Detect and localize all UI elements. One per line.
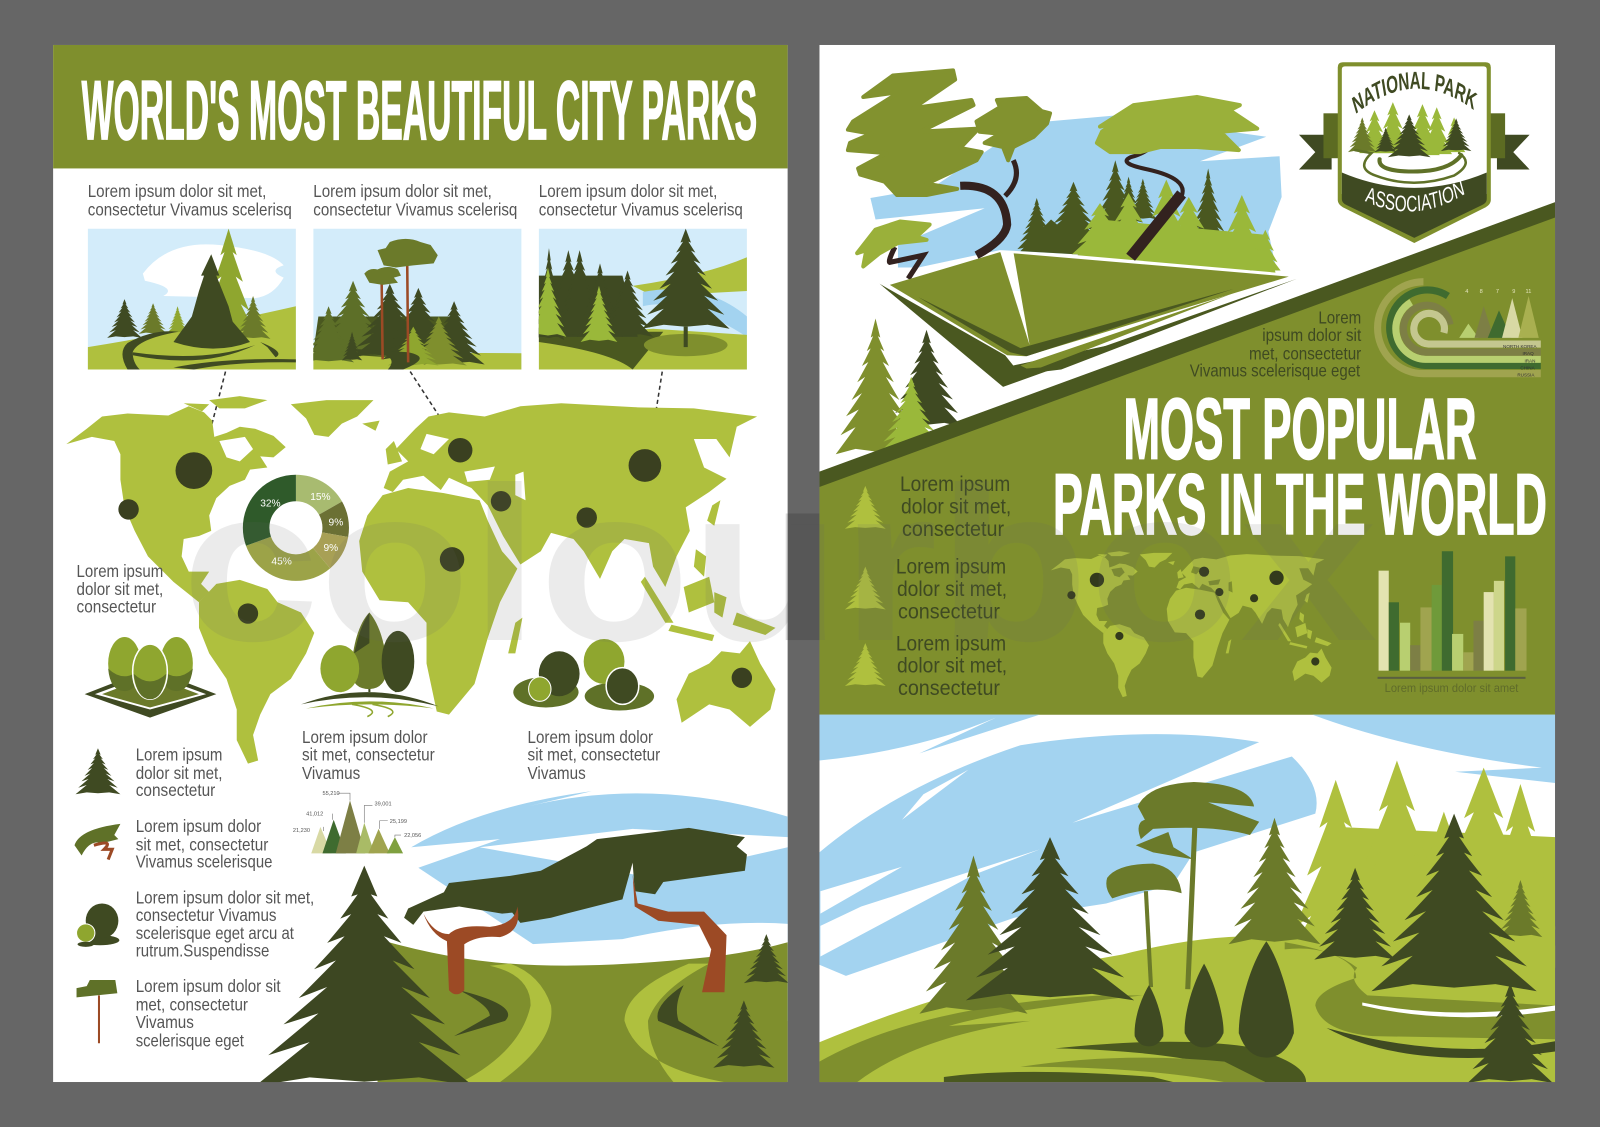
landscape image 2	[303, 229, 521, 370]
text: green note 3: dolor sit met,	[897, 655, 1007, 678]
scene: pale firs	[1285, 761, 1566, 968]
world map	[66, 396, 776, 764]
text: tree group note	[302, 730, 434, 779]
list text 4	[136, 976, 281, 1050]
peak chart: 4	[1465, 289, 1468, 295]
badge text bottom: ASSOCIATION	[1364, 181, 1464, 212]
icon: round tree	[77, 903, 119, 947]
badge	[1299, 62, 1530, 243]
list text 3: Lorem ipsum dolor sit met,	[136, 887, 314, 907]
text: green note 1: Lorem ipsum	[900, 473, 1010, 496]
map markers	[118, 438, 752, 688]
list text 1: dolor sit met,	[136, 763, 222, 783]
caption 2: consectetur Vivamus scelerisq	[313, 199, 517, 219]
text: upper note: Vivamus scelerisque eget	[1190, 361, 1360, 381]
text: cluster note: Lorem ipsum dolor	[528, 727, 653, 747]
list text 3: scelerisque eget arcu at	[136, 923, 294, 943]
scene: large fir	[255, 866, 473, 1086]
list text 1: Lorem ipsum	[136, 745, 222, 765]
text: upper note: Lorem	[1318, 308, 1361, 328]
peak chart	[1459, 289, 1539, 378]
landscape image 1	[88, 229, 296, 370]
green block with diagonal	[819, 202, 1555, 715]
donut chart: 45%	[271, 557, 292, 568]
badge text top: NATIONAL PARK	[1352, 72, 1478, 114]
scene: hills	[378, 939, 788, 1082]
text: cluster note: sit met, consectetur	[528, 745, 660, 765]
text: green note 2: dolor sit met,	[897, 578, 1007, 601]
icon: tall pine	[77, 980, 117, 1043]
bar chart: Lorem ipsum dolor sit amet	[1385, 681, 1519, 695]
text: map note	[77, 564, 162, 612]
caption 1	[88, 181, 292, 219]
text: map note: dolor sit met,	[77, 579, 163, 599]
list text 1: consectetur	[136, 780, 215, 800]
caption 3: consectetur Vivamus scelerisq	[539, 199, 743, 219]
bar chart	[1378, 551, 1527, 695]
caption 2	[313, 181, 517, 219]
mountain chart	[293, 791, 421, 853]
badge shield	[1338, 62, 1491, 243]
mountain chart: 55,210	[322, 791, 340, 797]
illustration: sky	[870, 115, 1282, 267]
headline	[1053, 380, 1547, 553]
scene: firs	[919, 814, 1553, 1083]
list text 3	[136, 887, 314, 961]
title band	[53, 45, 788, 168]
text: green note 2	[896, 556, 1007, 624]
mountain chart: 41,012	[306, 812, 323, 818]
icon: fir	[76, 748, 120, 794]
text: green note 1: consectetur	[902, 518, 1004, 541]
peak chart: RUSSIA	[1517, 373, 1535, 378]
peak chart: 8	[1480, 289, 1483, 295]
donut chart: 9%	[329, 518, 343, 529]
illustration: forest	[1017, 160, 1281, 273]
icon: round tree cluster	[513, 639, 654, 710]
list text 2: Vivamus scelerisque	[136, 852, 272, 872]
list text 3: rutrum.Suspendisse	[136, 941, 269, 961]
donut chart: 9%	[323, 543, 338, 554]
watermark gap bar	[786, 513, 819, 640]
peak chart: CHINA	[1520, 366, 1536, 371]
list text 4: Lorem ipsum dolor sit	[136, 976, 281, 996]
badge trees	[1348, 102, 1471, 157]
panel: right poster	[819, 45, 1556, 1082]
scene: white streaks	[820, 770, 1040, 957]
caption 1: Lorem ipsum dolor sit met,	[88, 181, 266, 201]
list text 4: met, consectetur	[136, 995, 248, 1015]
text: tree group note: sit met, consectetur	[302, 745, 435, 765]
text: green note 3: Lorem ipsum	[896, 632, 1006, 655]
text: green note 3	[896, 632, 1007, 700]
text: green note 2: consectetur	[898, 601, 1000, 624]
icon: windblown tree	[74, 824, 120, 860]
icon: light fir 2	[845, 567, 886, 609]
illustration: windblown canopies	[848, 70, 1257, 266]
text: map note: Lorem ipsum	[77, 561, 163, 581]
scene: small firs	[713, 934, 789, 1068]
illustration: park plot	[880, 251, 1297, 387]
text: green note 2: Lorem ipsum	[896, 556, 1006, 579]
donut chart: 32%	[260, 498, 281, 509]
list text 1	[136, 748, 222, 796]
scene: tall pines	[1106, 782, 1259, 989]
badge ribbon	[1299, 113, 1530, 169]
peak chart: IRAN	[1524, 358, 1535, 363]
text: upper note	[1190, 308, 1361, 381]
caption 3: Lorem ipsum dolor sit met,	[539, 181, 717, 201]
icon: three trees on plot	[85, 637, 216, 718]
scene: cypress trees	[1135, 941, 1294, 1058]
text: tree group note: Lorem ipsum dolor	[302, 727, 428, 747]
illustration: bent trunks	[889, 137, 1183, 279]
text: upper note: met, consectetur	[1249, 343, 1361, 363]
text: green note 1	[900, 473, 1011, 541]
mini map markers	[1067, 567, 1319, 666]
list text 2	[136, 816, 272, 872]
connector lines	[212, 371, 663, 424]
track chart	[1378, 282, 1541, 374]
donut chart: 15%	[310, 492, 331, 503]
text: tree group note: Vivamus	[302, 763, 360, 783]
caption 1: consectetur Vivamus scelerisq	[88, 199, 292, 219]
mini world map	[1051, 551, 1332, 697]
text: upper note: ipsum dolor sit	[1262, 325, 1361, 345]
icon: light fir 1	[845, 486, 886, 529]
watermark: colourbox	[182, 441, 1378, 687]
caption 3	[539, 181, 743, 219]
list text 2: Lorem ipsum dolor	[136, 816, 261, 836]
icon: light fir 3	[845, 643, 886, 686]
panel: left poster	[53, 45, 789, 1086]
text: green note 1: dolor sit met,	[901, 495, 1011, 518]
icon: tree group with road	[301, 612, 439, 717]
scene: windswept tree	[404, 828, 747, 994]
list text 3: consectetur Vivamus	[136, 905, 277, 925]
mountain chart: 39,001	[374, 801, 392, 807]
peak chart: IRAQ	[1522, 351, 1534, 356]
landscape image 3	[530, 229, 747, 370]
list text 2: sit met, consectetur	[136, 834, 268, 854]
list text 4: Vivamus	[136, 1012, 194, 1032]
donut chart	[256, 488, 343, 568]
text: cluster note: Vivamus	[528, 763, 586, 783]
scene: hill	[819, 934, 1555, 1082]
illustration: firs on slope	[836, 318, 962, 454]
caption 2: Lorem ipsum dolor sit met,	[313, 181, 492, 201]
mountain chart: 25,199	[390, 819, 407, 825]
peak chart: 7	[1496, 289, 1499, 295]
scene: winding road	[1285, 942, 1555, 1058]
mountain chart: 21,230	[293, 828, 310, 834]
peak chart: NORTH KOREA	[1503, 344, 1537, 349]
badge road	[1355, 150, 1466, 183]
peak chart: 9	[1512, 289, 1515, 295]
text: map note: consectetur	[77, 596, 156, 617]
scene: white clouds	[439, 829, 788, 968]
scene: shadows	[944, 1042, 1306, 1082]
text: cluster note	[528, 730, 660, 779]
list text 4: scelerisque eget	[136, 1030, 244, 1050]
scene: sky	[411, 791, 788, 1021]
mountain chart: 22,056	[404, 833, 421, 839]
scene: sky bands	[819, 715, 1555, 976]
peak chart: 11	[1526, 289, 1531, 295]
text: green note 3: consectetur	[898, 677, 1000, 700]
